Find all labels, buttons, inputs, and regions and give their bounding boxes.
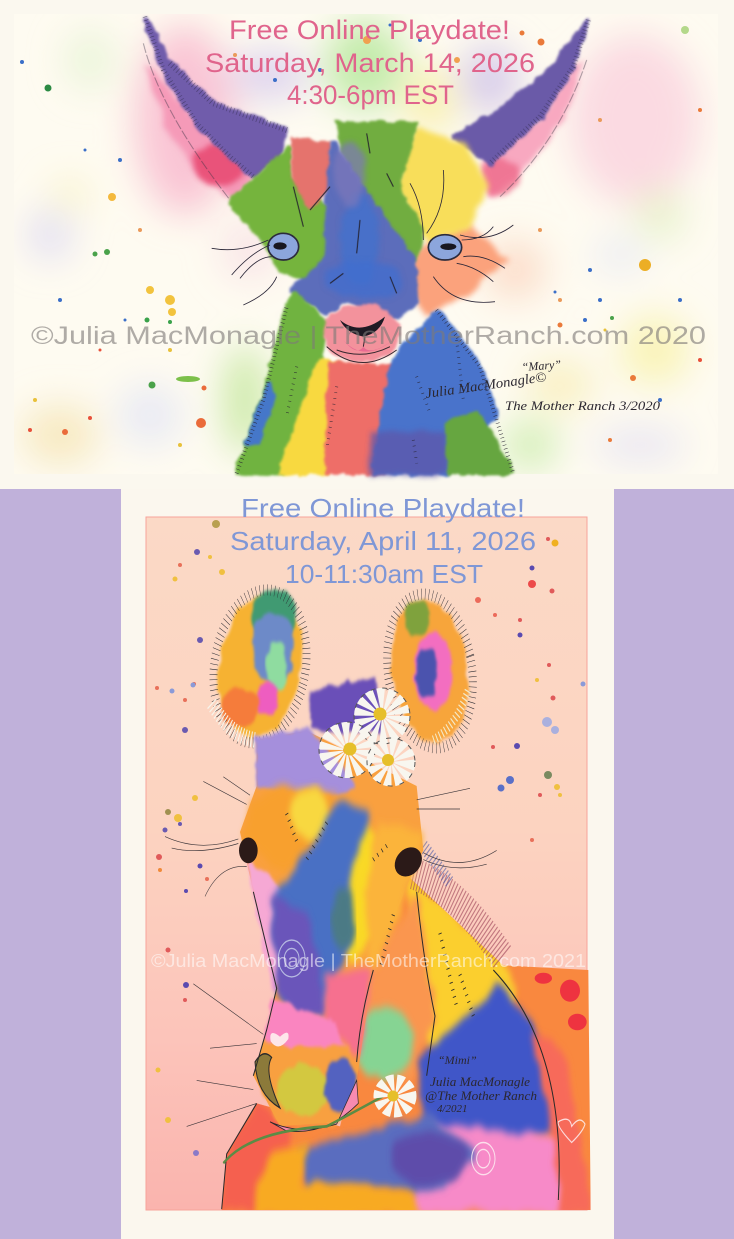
foal mane [413,846,503,958]
artist signature: goat: Julia MacMonagle© [424,370,548,402]
foal forelock [310,680,380,731]
daisy: left [319,722,375,778]
playdate heading: March [205,15,535,110]
red blossoms on shoulder [535,973,587,1030]
artist signature: goat: The Mother Ranch 3/2020 [505,398,661,413]
daisy: top [354,688,410,744]
goat [143,17,588,473]
foal eyes and lashes [165,777,497,1126]
playdate heading: April: 10-11:30am EST [285,559,483,589]
lavender page background [0,489,734,1239]
panel: foal painting [121,489,614,1239]
daisy: right [367,738,415,786]
artist signature: foal: “Mimi” [438,1053,477,1067]
foal ears [198,572,485,761]
foal [165,572,593,1214]
panel: goat painting [0,0,734,489]
artist signature: foal: 4/2021 [437,1103,468,1115]
goat eyes and lashes [212,170,513,305]
spiral and heart marks [278,940,585,1175]
goat neck and chest [237,293,513,473]
watercolor paper [14,14,718,474]
background washes [22,20,700,470]
artist signature: goat [424,357,661,413]
playdate heading: March: 4:30-6pm EST [287,80,454,110]
artist signature: foal: @The Mother Ranch [425,1089,537,1103]
playdate heading: April: Free Online Playdate! [241,493,525,523]
goat ears [143,17,588,200]
watermark: foal: ©Julia MacMonagle | TheMotherRanch.com 2021 [151,951,586,971]
foal head patches [222,731,559,1209]
watercolor paper [146,517,587,1210]
goat head patches [230,123,503,317]
artist signature: goat: “Mary” [521,357,562,374]
paper mat [121,489,614,1239]
paper mat [0,0,734,489]
stem in mouth [223,1094,387,1163]
goat splatter dots [20,24,702,447]
watermark: goat: ©Julia MacMonagle | TheMotherRanch.com 2020 [31,322,706,350]
artist signature: foal [425,1053,537,1115]
artist signature: foal: Julia MacMonagle [430,1075,530,1089]
foal splatter dots [155,520,586,1156]
daisy in mouth [383,1084,407,1108]
playdate heading: March: Saturday, March 14, 2026 [205,48,535,78]
playdate heading: April [230,493,536,589]
daisy crown [319,688,415,786]
goat nose and mouth [326,307,398,363]
playdate heading: March: Free Online Playdate! [229,15,510,45]
foal neck and body [220,873,593,1214]
playdate heading: April: Saturday, April 11, 2026 [230,526,536,556]
